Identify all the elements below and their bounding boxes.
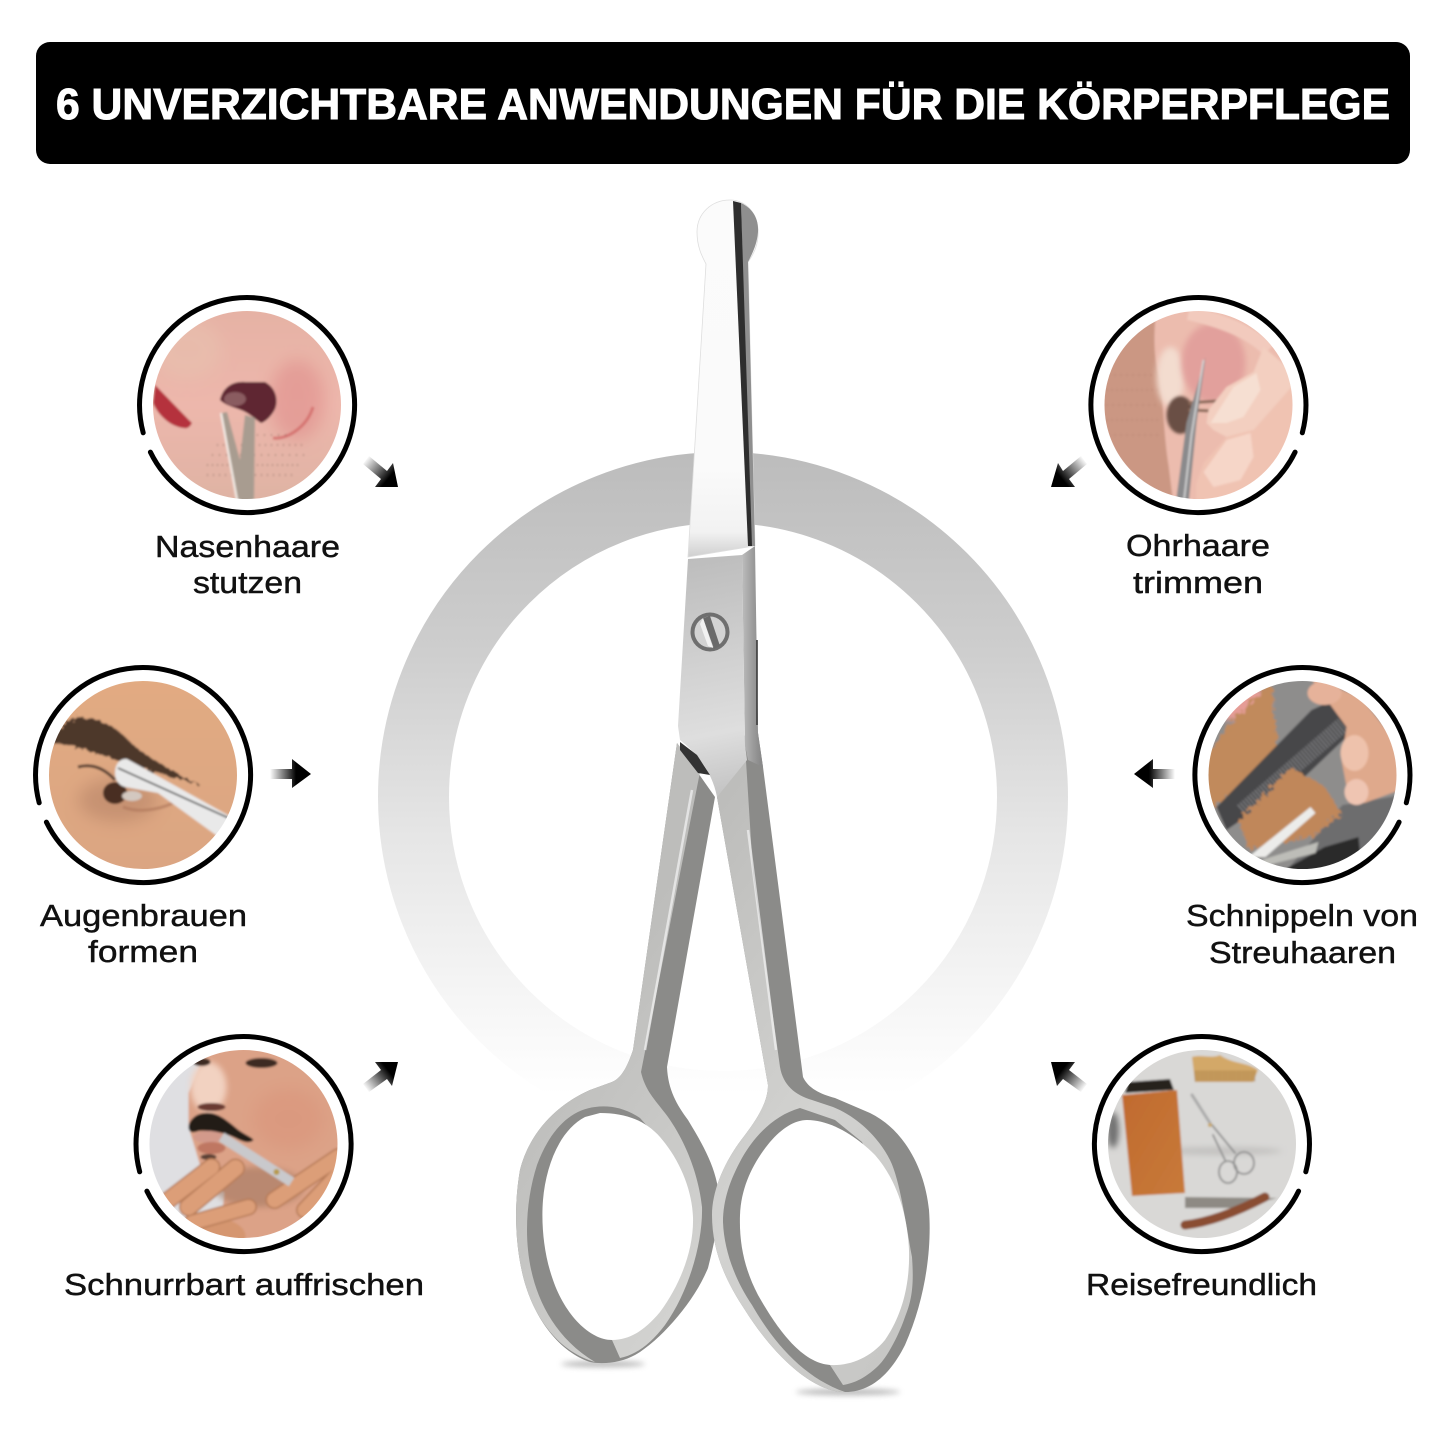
pivot plate	[678, 546, 763, 797]
pivot screw	[690, 612, 730, 652]
label	[40, 898, 247, 969]
label: Augenbrauen	[40, 898, 247, 933]
label	[1186, 898, 1418, 970]
label: trimmen	[1133, 565, 1263, 600]
photo: moustache	[150, 1050, 338, 1238]
label: Ohrhaare	[1126, 528, 1270, 563]
title banner	[36, 42, 1410, 164]
arrow	[1051, 456, 1087, 487]
ring	[1091, 298, 1306, 513]
title: 6 UNVERZICHTBARE ANWENDUNGEN FÜR DIE KÖRPERPFLEGE	[56, 80, 1390, 129]
label: Streuhaaren	[1209, 935, 1396, 970]
panel: Schnurrbart auffrischen	[64, 1037, 424, 1302]
arrow	[1051, 1062, 1087, 1092]
ring	[1094, 1037, 1309, 1252]
ring	[1195, 668, 1410, 883]
left handle	[516, 743, 719, 1363]
arrow	[1134, 759, 1175, 788]
photo: eyebrow	[49, 681, 237, 869]
label: Nasenhaare	[155, 529, 340, 564]
scissors product	[516, 200, 930, 1395]
label: Schnurrbart auffrischen	[64, 1267, 424, 1302]
panel: Augenbrauen formen	[36, 668, 311, 969]
label: stutzen	[193, 565, 302, 600]
label	[155, 529, 340, 600]
gradient background ring	[414, 488, 1032, 1106]
ring	[36, 668, 251, 883]
arrow	[270, 759, 311, 788]
panel: Ohrhaare trimmen	[1051, 298, 1306, 600]
panel: Reisefreundlich	[1051, 1037, 1317, 1302]
ring	[136, 1037, 351, 1252]
label: formen	[88, 934, 198, 969]
upper blade	[688, 200, 758, 557]
ring	[140, 298, 355, 513]
photo: nose	[153, 311, 341, 499]
photo: ear	[1104, 311, 1292, 499]
panel: Nasenhaare stutzen	[140, 298, 398, 600]
arrow	[363, 456, 398, 487]
label	[1126, 528, 1270, 600]
label: Schnippeln von	[1186, 898, 1418, 933]
panel: Schnippeln von Streuhaaren	[1134, 668, 1418, 970]
photo: travel kit	[1108, 1050, 1296, 1238]
arrow	[363, 1062, 398, 1092]
label: Reisefreundlich	[1086, 1267, 1317, 1302]
right handle	[712, 733, 930, 1392]
handle shadows	[561, 1361, 900, 1395]
photo: beard and comb	[1208, 681, 1396, 869]
